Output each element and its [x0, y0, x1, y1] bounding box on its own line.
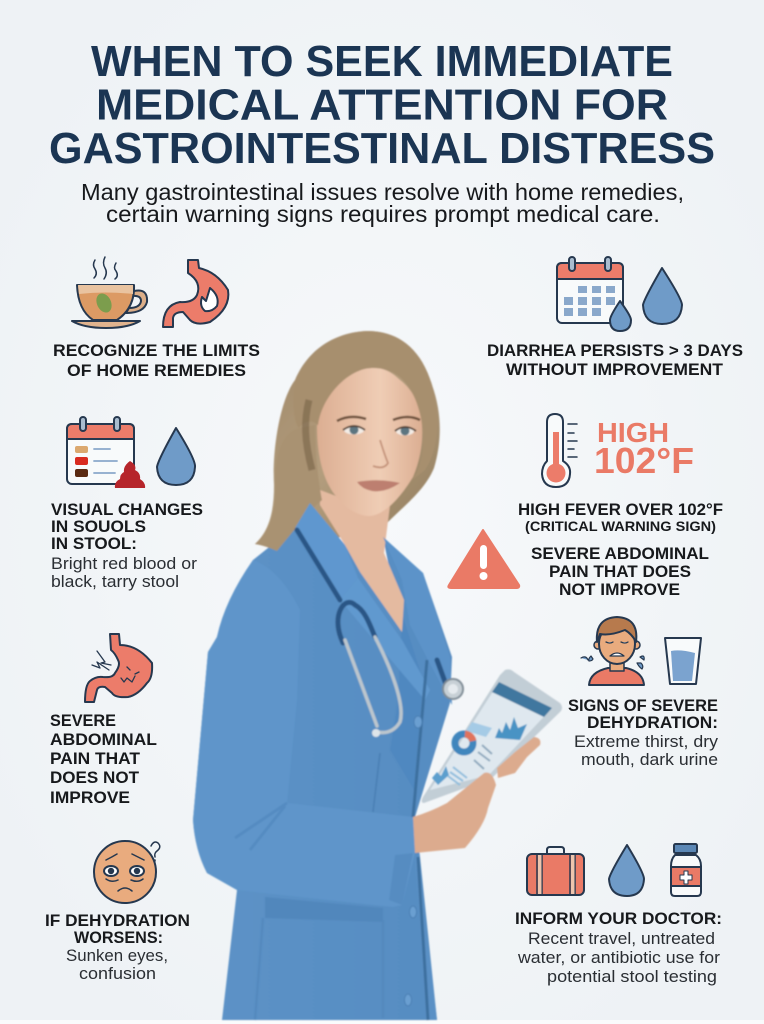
sleeve — [193, 560, 415, 907]
icon: water drop — [643, 268, 682, 324]
icon: medicine bottle — [671, 844, 701, 896]
heading: SEVERE ABDOMINAL — [531, 544, 709, 563]
icon: water drop — [609, 845, 644, 896]
icon: stool — [115, 461, 145, 488]
icon: calendar with stool chart — [67, 417, 134, 484]
heading: INFORM YOUR DOCTOR: — [515, 909, 722, 928]
doctor photo — [193, 331, 562, 1020]
collar left — [295, 503, 358, 600]
icon: stomach with pain — [85, 634, 152, 702]
hand — [413, 737, 540, 853]
icon: calendar with drop — [557, 257, 631, 331]
heading: VISUAL CHANGES — [51, 500, 203, 519]
coat front edge — [415, 857, 437, 1020]
title — [49, 37, 715, 173]
left item 3: abdominal pain: PAIN THAT — [50, 749, 141, 768]
body text: Bright red blood or — [51, 555, 198, 573]
eyebrows — [337, 417, 420, 421]
eyes — [343, 426, 416, 436]
stethoscope — [297, 530, 448, 737]
left item 4: dehydration worsens: WORSENS: — [74, 928, 163, 947]
title: MEDICAL ATTENTION FOR — [96, 80, 668, 130]
heading: SEVERE — [50, 711, 116, 730]
buttons — [404, 716, 422, 1006]
icon: confused face — [94, 841, 160, 903]
right item 5: inform your doctor: potential stool testing — [547, 968, 717, 986]
right item 4: severe dehydration: mouth, dark urine — [581, 751, 718, 769]
mouth — [357, 480, 400, 491]
coat body — [193, 503, 452, 1020]
icon: sad person — [581, 617, 644, 685]
subtitle: Many gastrointestinal issues resolve with home remedies, — [81, 179, 684, 205]
face — [317, 368, 422, 516]
subtitle: certain warning signs requires prompt medical care. — [106, 201, 660, 227]
right item 3: warning: PAIN THAT DOES — [549, 562, 691, 581]
body text: Extreme thirst, dry — [574, 733, 719, 751]
heading: RECOGNIZE THE LIMITS — [53, 341, 260, 360]
heading: SIGNS OF SEVERE — [568, 696, 718, 715]
icon: suitcase — [527, 847, 584, 895]
bar charts — [495, 717, 527, 740]
left item 3: abdominal pain — [50, 634, 157, 807]
right item 1: diarrhea: WITHOUT IMPROVEMENT — [506, 360, 724, 379]
title: WHEN TO SEEK IMMEDIATE — [91, 37, 673, 86]
inner shirt — [390, 613, 423, 790]
left item 3: abdominal pain: DOES NOT — [50, 768, 140, 787]
left item 1: home remedies: OF HOME REMEDIES — [67, 361, 246, 380]
icon: glass of water — [665, 638, 701, 684]
left item 3: abdominal pain: IMPROVE — [50, 788, 130, 807]
tablet — [422, 669, 562, 803]
left item 2: stool changes: IN STOOL: — [51, 534, 137, 553]
right item 4: severe dehydration: DEHYDRATION: — [587, 713, 718, 732]
ear — [298, 428, 314, 456]
icon: thermometer — [542, 414, 577, 487]
left item 2: stool changes: black, tarry stool — [51, 573, 179, 591]
right item 2: high fever — [518, 414, 723, 534]
right item 5: inform your doctor: water, or antibiotic use for — [517, 949, 721, 967]
donut chart — [455, 734, 473, 752]
icon: water drop — [157, 428, 195, 485]
right item 3: warning: NOT IMPROVE — [559, 580, 680, 599]
collar right — [383, 537, 452, 705]
left item 4: dehydration worsens: confusion — [79, 965, 156, 983]
subtitle — [81, 179, 684, 227]
right item 1: diarrhea — [487, 257, 743, 379]
right item 4: severe dehydration — [568, 617, 719, 769]
chest piece — [443, 679, 463, 699]
high 102F label: HIGH — [597, 417, 669, 448]
body text: Recent travel, untreated — [528, 930, 715, 948]
hair back — [255, 331, 440, 551]
neck and chest — [320, 490, 404, 632]
right item 3: warning — [448, 530, 709, 599]
left item 3: abdominal pain: ABDOMINAL — [50, 730, 157, 749]
icon: warning triangle — [448, 530, 519, 588]
icon: tea cup — [72, 257, 147, 328]
high 102F label — [594, 417, 694, 481]
pocket — [255, 897, 383, 1020]
right item 5: inform your doctor — [515, 844, 722, 986]
left item 2: stool changes — [51, 417, 203, 591]
heading: IF DEHYDRATION — [45, 911, 190, 930]
heading: HIGH FEVER OVER 102°F — [518, 500, 723, 519]
icon: stomach with flame — [163, 260, 228, 327]
hair front — [293, 331, 437, 480]
left item 4: dehydration worsens — [45, 841, 190, 983]
high 102F label: 102°F — [594, 440, 694, 481]
right item 2: high fever: (CRITICAL WARNING SIGN) — [525, 518, 716, 534]
heading: DIARRHEA PERSISTS > 3 DAYS — [487, 341, 743, 360]
body text: Sunken eyes, — [66, 947, 168, 965]
title: GASTROINTESTINAL DISTRESS — [49, 124, 715, 173]
left item 2: stool changes: IN SOUOLS — [51, 517, 146, 536]
left item 1: home remedies — [53, 257, 260, 380]
nose — [373, 440, 388, 467]
